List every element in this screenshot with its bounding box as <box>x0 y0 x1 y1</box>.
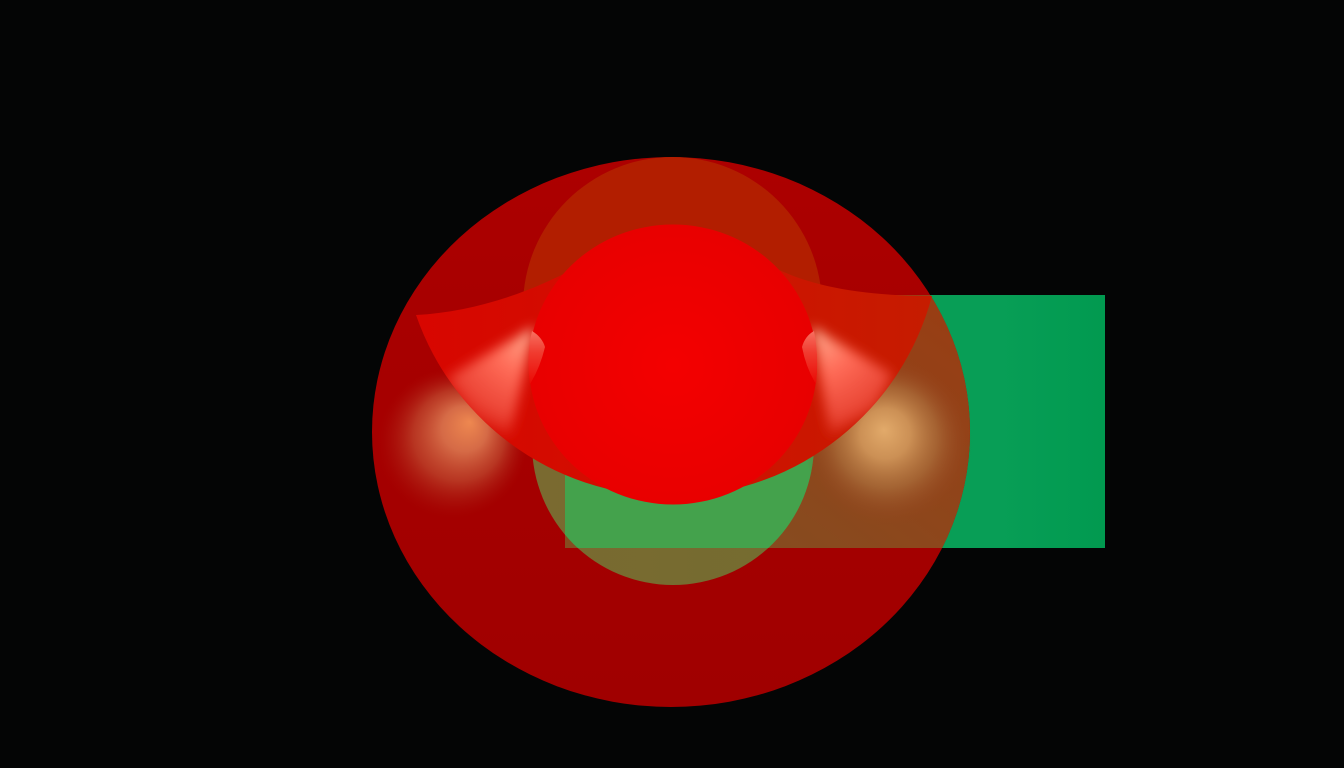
left highlight chip on central circle <box>528 331 545 384</box>
large dark red circle <box>372 157 970 707</box>
green overlap of rectangle and lower circle <box>565 456 814 548</box>
right glow <box>804 358 972 526</box>
lower green circle <box>532 303 814 585</box>
right highlight chip on central circle <box>802 331 817 384</box>
left light beam <box>446 327 534 436</box>
abstract overlapping shapes graphic <box>372 157 1105 707</box>
central bright red circle <box>529 224 817 504</box>
green rectangle <box>565 295 1105 548</box>
left glow <box>376 368 528 520</box>
rectangle overlap tint inside the large circle <box>565 295 970 548</box>
upper translucent circle <box>523 157 822 456</box>
right light beam <box>812 327 892 436</box>
lens shaped red cap <box>416 268 932 497</box>
